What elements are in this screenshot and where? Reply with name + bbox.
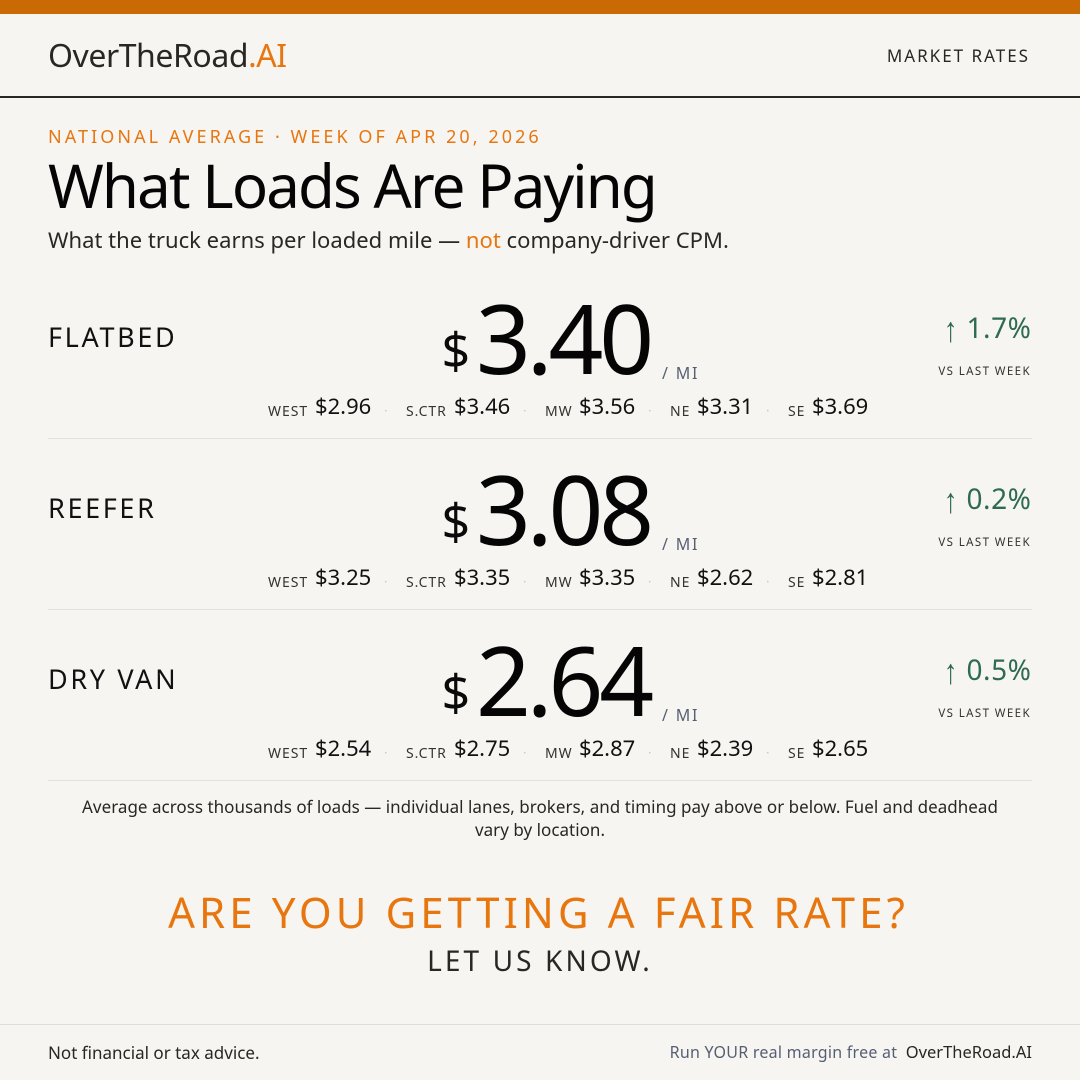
header logo: OverTheRoad.AI [48, 34, 287, 77]
dry van change: 0.5% [966, 651, 1032, 689]
flatbed regional rates: MW [545, 402, 573, 421]
dry van regional rates: · [523, 743, 526, 761]
dry van comparison label: VS LAST WEEK [938, 706, 1031, 721]
top accent bar [0, 0, 1080, 14]
dry van dollar sign: $ [442, 658, 470, 726]
flatbed unit: / MI [662, 362, 699, 384]
reefer regional rates: · [523, 572, 526, 590]
dry van unit: / MI [662, 704, 699, 726]
reefer regional rates: · [384, 572, 387, 590]
reefer comparison label: VS LAST WEEK [938, 535, 1031, 550]
reefer regional rates: $3.35 [454, 562, 510, 592]
call to action headline: ARE YOU GETTING A FAIR RATE? [168, 884, 909, 941]
flatbed dollar sign: $ [442, 316, 470, 384]
dry van regional rates: · [648, 743, 651, 761]
reefer regional rates: MW [545, 573, 573, 592]
dry van regional rates: NE [670, 744, 690, 763]
dry van regional rates: S.CTR [406, 744, 447, 763]
flatbed regional rates: NE [670, 402, 690, 421]
reefer regional rates: NE [670, 573, 690, 592]
flatbed regional rates: · [648, 401, 651, 419]
dry van label: DRY VAN [48, 660, 178, 697]
flatbed regional rates: SE [788, 402, 805, 421]
flatbed regional rates [268, 391, 868, 421]
dry van regional rates: $2.39 [697, 733, 753, 763]
flatbed regional rates: $3.46 [454, 391, 510, 421]
panel: flatbed [48, 272, 1032, 421]
dry van regional rates: $2.87 [579, 733, 635, 763]
flatbed regional rates: · [766, 401, 769, 419]
dry van regional rates [268, 733, 868, 763]
flatbed regional rates: · [384, 401, 387, 419]
footer rule [0, 1024, 1080, 1025]
flatbed regional rates: $3.69 [812, 391, 868, 421]
reefer dollar sign: $ [442, 487, 470, 555]
reefer change: ↑ [944, 481, 958, 520]
panel: reefer [48, 443, 1032, 592]
flatbed change: ↑ [944, 310, 958, 349]
flatbed regional rates: $3.31 [697, 391, 753, 421]
reefer regional rates: $2.81 [812, 562, 868, 592]
reefer regional rates: SE [788, 573, 805, 592]
reefer change: 0.2% [966, 480, 1032, 518]
dry van regional rates: MW [545, 744, 573, 763]
flatbed price: 3.40 [476, 272, 650, 403]
reefer regional rates: $3.35 [579, 562, 635, 592]
flatbed label: FLATBED [48, 318, 177, 355]
reefer unit: / MI [662, 533, 699, 555]
footer disclaimer: Not financial or tax advice. [48, 1041, 260, 1064]
dry van regional rates: $2.65 [812, 733, 868, 763]
reefer regional rates: S.CTR [406, 573, 447, 592]
dry van change: ↑ [944, 652, 958, 691]
reefer price: 3.08 [476, 443, 650, 574]
dry van price: 2.64 [476, 614, 650, 745]
dry van regional rates: WEST [268, 744, 308, 763]
reefer regional rates: WEST [268, 573, 308, 592]
title: What Loads Are Paying [48, 144, 656, 226]
reefer regional rates: $3.25 [315, 562, 371, 592]
dry van regional rates: SE [788, 744, 805, 763]
reefer regional rates: $2.62 [697, 562, 753, 592]
flatbed regional rates: S.CTR [406, 402, 447, 421]
dry van regional rates: $2.75 [454, 733, 510, 763]
disclaimer note: vary by location. [475, 818, 605, 841]
reefer label: REEFER [48, 489, 157, 526]
reefer regional rates: · [766, 572, 769, 590]
subtitle: What the truck earns per loaded mile — not company-driver CPM. [48, 225, 729, 255]
disclaimer note [82, 795, 998, 841]
disclaimer note: Average across thousands of loads — individual lanes, brokers, and timing pay above or below. Fuel and deadhead [82, 795, 998, 818]
reefer regional rates [268, 562, 868, 592]
flatbed comparison label: VS LAST WEEK [938, 364, 1031, 379]
header rule [0, 96, 1080, 98]
dry van regional rates: $2.54 [315, 733, 371, 763]
eyebrow: NATIONAL AVERAGE · WEEK OF APR 20, 2026 [48, 125, 542, 149]
header section label: MARKET RATES [887, 44, 1030, 67]
dry van regional rates: · [384, 743, 387, 761]
flatbed change: 1.7% [966, 309, 1032, 347]
flatbed regional rates: $2.96 [315, 391, 371, 421]
flatbed regional rates: $3.56 [579, 391, 635, 421]
footer link: Run YOUR real margin free at OverTheRoad.AI [670, 1040, 1032, 1063]
panel: dry van [48, 614, 1032, 763]
call to action subline: LET US KNOW. [427, 942, 653, 980]
flatbed regional rates: · [523, 401, 526, 419]
dry van regional rates: · [766, 743, 769, 761]
flatbed regional rates: WEST [268, 402, 308, 421]
reefer regional rates: · [648, 572, 651, 590]
